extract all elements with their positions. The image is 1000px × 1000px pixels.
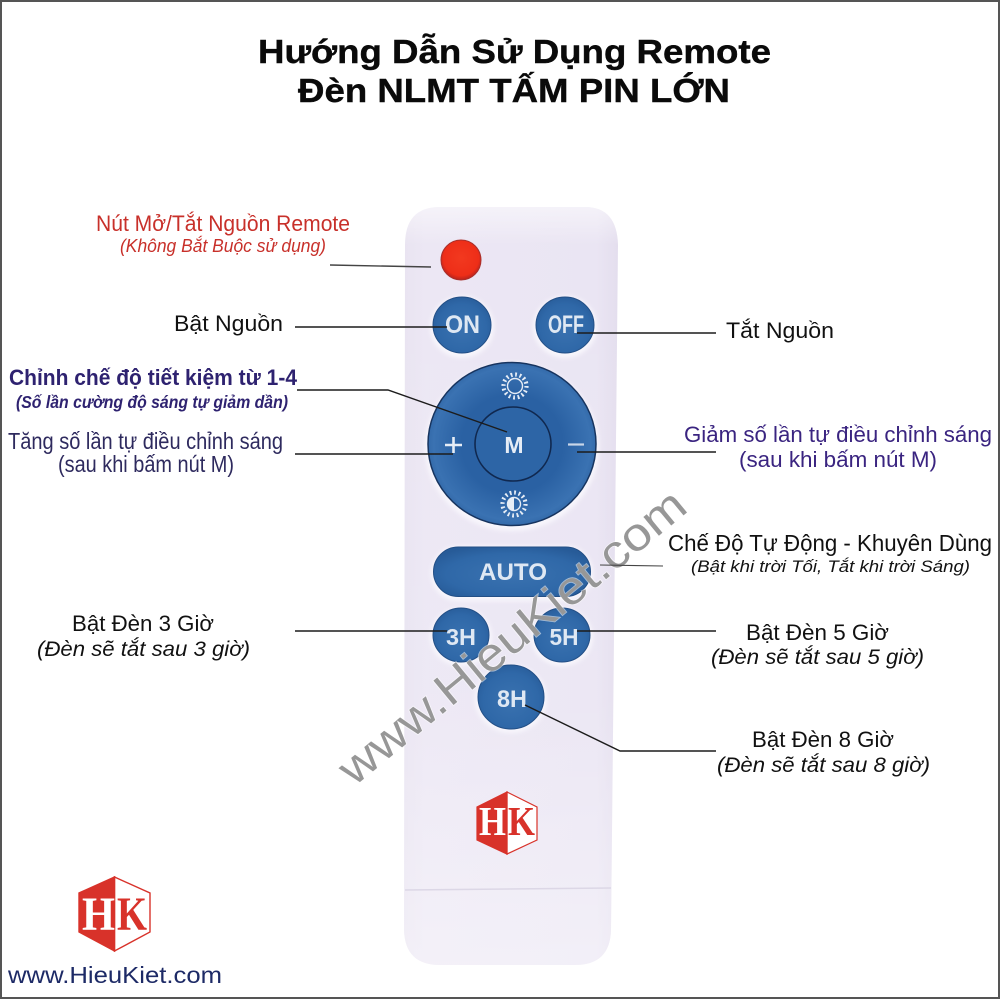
brand logo (79, 877, 150, 951)
button: ON (433, 297, 491, 353)
label: AUTO (668, 530, 992, 576)
label: 3H: (Đèn sẽ tắt sau 3 giờ) (37, 638, 250, 661)
logo on remote: K (508, 798, 535, 844)
title: Hướng Dẫn Sử Dụng Remote (258, 33, 771, 70)
label: 5H: (Đèn sẽ tắt sau 5 giờ) (711, 646, 924, 669)
icon: plus (445, 437, 462, 453)
button: AUTO: AUTO (479, 559, 547, 586)
button: OFF (536, 297, 594, 353)
icon: minus (568, 443, 584, 446)
remote body (404, 207, 618, 965)
button: 8H: 8H (497, 686, 527, 713)
label: power button (96, 211, 350, 256)
label: plus button (8, 428, 283, 477)
button: M (475, 407, 551, 481)
button: M: M (504, 432, 524, 458)
icon: brightness up (504, 374, 526, 398)
button: OFF: OFF (548, 311, 584, 339)
label: 8H (717, 727, 930, 777)
label: plus button: Tăng số lần tự điều chỉnh sáng (8, 428, 283, 454)
remote control (404, 207, 618, 965)
brand logo: H (82, 888, 115, 941)
label: AUTO: Chế Độ Tự Động - Khuyên Dùng (668, 530, 992, 556)
label: AUTO: (Bật khi trời Tối, Tắt khi trời Sáng) (691, 557, 970, 576)
button: 3H: 3H (446, 624, 476, 650)
label: 5H (711, 620, 924, 669)
label: plus button: (sau khi bấm nút M) (58, 451, 234, 477)
title (258, 33, 771, 109)
label: minus button: Giảm số lần tự điều chỉnh sáng (684, 422, 992, 447)
label: 8H: Bật Đèn 8 Giờ (752, 727, 894, 752)
label: 3H (37, 611, 250, 661)
label: M button: Chỉnh chế độ tiết kiệm từ 1-4 (9, 365, 298, 390)
website: www.HieuKiet.com (7, 962, 222, 988)
label: M button (9, 365, 298, 412)
button: 8H (478, 665, 544, 729)
label: minus button: (sau khi bấm nút M) (739, 447, 937, 472)
button: mode dial (428, 362, 596, 526)
label: 3H: Bật Đèn 3 Giờ (72, 611, 214, 636)
button: red power (441, 240, 481, 280)
watermark: www.HieuKiet.com (326, 478, 696, 795)
icon: brightness down (502, 492, 526, 516)
label: ON: Bật Nguồn (174, 311, 283, 336)
button: 5H (534, 608, 590, 662)
label: 5H: Bật Đèn 5 Giờ (746, 620, 889, 645)
label: minus button (684, 422, 992, 472)
label: 8H: (Đèn sẽ tắt sau 8 giờ) (717, 754, 930, 777)
button halos (425, 296, 599, 733)
label: power button: Nút Mở/Tắt Nguồn Remote (96, 211, 350, 236)
logo on remote: H (479, 798, 506, 844)
label: power button: (Không Bắt Buộc sử dụng) (120, 236, 326, 256)
brand logo: K (117, 888, 147, 941)
button: ON: ON (445, 311, 480, 339)
logo on remote (477, 792, 537, 854)
label: OFF: Tắt Nguồn (726, 318, 834, 343)
button: 5H: 5H (550, 624, 578, 650)
label: M button: (Số lần cường độ sáng tự giảm dần) (16, 392, 288, 412)
button: 3H (433, 608, 489, 662)
title: Đèn NLMT TẤM PIN LỚN (298, 72, 730, 109)
leader lines (295, 265, 716, 751)
button: AUTO (434, 547, 590, 596)
